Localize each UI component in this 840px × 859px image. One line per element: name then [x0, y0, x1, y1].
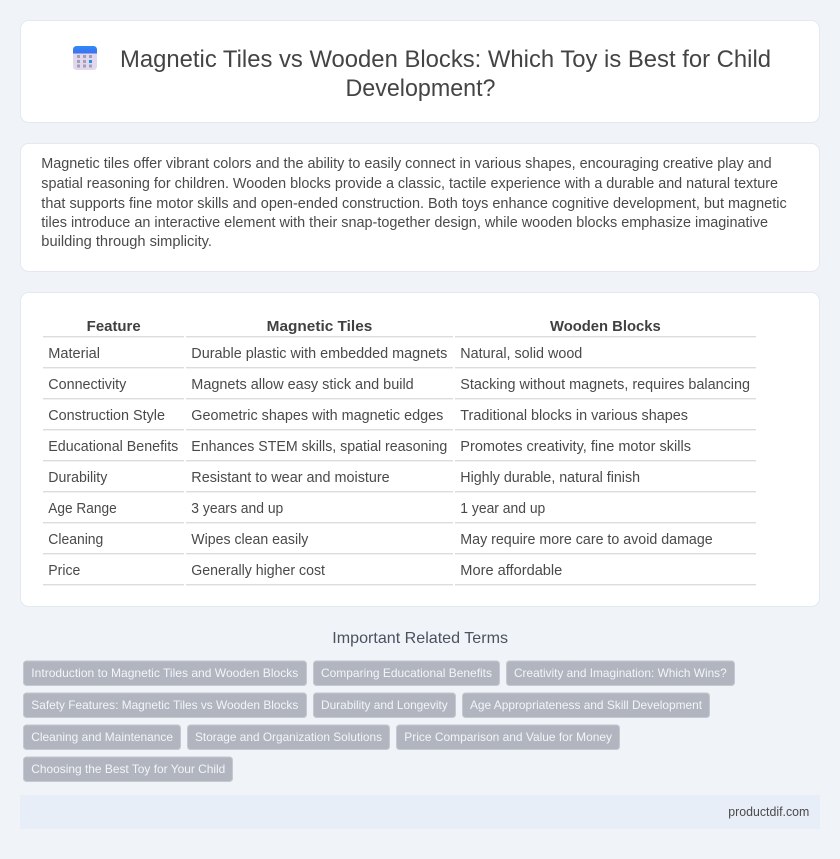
- table row: material: Natural, solid wood: [460, 346, 582, 362]
- tag: storage: Storage and Organization Solutions: [195, 730, 382, 744]
- table header row: Magnetic Tiles: [267, 319, 372, 335]
- intro paragraph: tiles introduce an interactive element with their snap-together design, while wooden blocks emphasize imaginative: [41, 215, 768, 231]
- tag: durability: Durability and Longevity: [321, 698, 448, 712]
- table row: educational benefits: [43, 439, 756, 461]
- tag: cleaning: Cleaning and Maintenance: [31, 730, 173, 744]
- footer bar: [20, 795, 820, 829]
- tag: age appropriateness: Age Appropriateness and Skill Development: [470, 698, 703, 712]
- intro paragraph: [41, 156, 787, 250]
- table row: cleaning: [43, 532, 756, 554]
- table row: age range: 1 year and up: [460, 501, 545, 517]
- tag: introduction: [24, 661, 306, 686]
- intro paragraph: that supports fine motor skills and open-ended construction. Both toys enhance cognitive development, but magnetic: [41, 196, 787, 212]
- table row: durability: Durability: [48, 470, 108, 486]
- tag: choosing: Choosing the Best Toy for Your Child: [31, 762, 225, 776]
- table row: durability: Resistant to wear and moisture: [191, 470, 390, 486]
- tag: educational benefits: Comparing Educational Benefits: [321, 666, 492, 680]
- table row: material: [43, 346, 756, 368]
- tag: choosing: [24, 757, 232, 782]
- table row: construction style: Traditional blocks in various shapes: [460, 408, 688, 424]
- table row: cleaning: May require more care to avoid damage: [460, 532, 713, 548]
- table header row: Feature: [87, 319, 141, 335]
- table row: construction style: Construction Style: [48, 408, 165, 424]
- table row: material: Material: [48, 346, 100, 362]
- icon: calendar grid: [73, 46, 97, 70]
- table row: cleaning: Wipes clean easily: [191, 532, 309, 548]
- table row: price: More affordable: [460, 563, 562, 579]
- heading: important related terms: Important Related Terms: [332, 630, 508, 647]
- tag: price: [396, 725, 620, 750]
- table row: price: Price: [48, 563, 80, 579]
- table row: age range: [43, 501, 756, 523]
- tag: safety: [24, 693, 306, 718]
- footer bar: productdif.com: [728, 804, 809, 819]
- table row: construction style: [43, 408, 756, 430]
- table row: material: Durable plastic with embedded magnets: [191, 346, 447, 362]
- tag: durability: [314, 693, 456, 718]
- intro paragraph: spatial reasoning for children. Wooden blocks provide a classic, tactile experience with a durable and natural texture: [41, 176, 778, 192]
- title: [120, 46, 771, 102]
- table row: connectivity: [43, 377, 756, 399]
- intro paragraph: Magnetic tiles offer vibrant colors and the ability to easily connect in various shapes, encouraging creative play and: [41, 156, 772, 172]
- table row: educational benefits: Promotes creativity, fine motor skills: [460, 439, 691, 455]
- panel: introduction: [20, 144, 820, 272]
- table header row: [43, 319, 756, 337]
- tag: cleaning: [24, 725, 180, 750]
- tag: creativity: [506, 661, 734, 686]
- panel: comparison table: [20, 292, 820, 606]
- table row: educational benefits: Educational Benefits: [48, 439, 178, 455]
- table row: price: Generally higher cost: [191, 563, 325, 579]
- table row: educational benefits: Enhances STEM skills, spatial reasoning: [191, 439, 447, 455]
- table row: age range: 3 years and up: [191, 501, 283, 517]
- tag: age appropriateness: [462, 693, 710, 718]
- panel: title header: [20, 20, 820, 122]
- table row: connectivity: Stacking without magnets, requires balancing: [460, 377, 750, 393]
- table row: age range: Age Range: [48, 501, 117, 517]
- title: Magnetic Tiles vs Wooden Blocks: Which Toy is Best for Child: [120, 46, 771, 73]
- tag: safety: Safety Features: Magnetic Tiles vs Wooden Blocks: [31, 698, 298, 712]
- table row: construction style: Geometric shapes with magnetic edges: [191, 408, 443, 424]
- tag: creativity: Creativity and Imagination: Which Wins?: [514, 666, 727, 680]
- table header row: Wooden Blocks: [550, 319, 661, 335]
- tag: educational benefits: [314, 661, 500, 686]
- table row: durability: [43, 470, 756, 492]
- tag: price: Price Comparison and Value for Money: [404, 730, 612, 744]
- tag: introduction: Introduction to Magnetic Tiles and Wooden Blocks: [31, 666, 298, 680]
- table row: connectivity: Magnets allow easy stick and build: [191, 377, 414, 393]
- table row: cleaning: Cleaning: [48, 532, 103, 548]
- title: Development?: [346, 75, 496, 102]
- table row: connectivity: Connectivity: [48, 377, 127, 393]
- table row: durability: Highly durable, natural finish: [460, 470, 640, 486]
- tag list: related terms: [24, 661, 734, 782]
- intro paragraph: building through simplicity.: [41, 234, 212, 250]
- tag: storage: [188, 725, 390, 750]
- table row: price: [43, 563, 756, 585]
